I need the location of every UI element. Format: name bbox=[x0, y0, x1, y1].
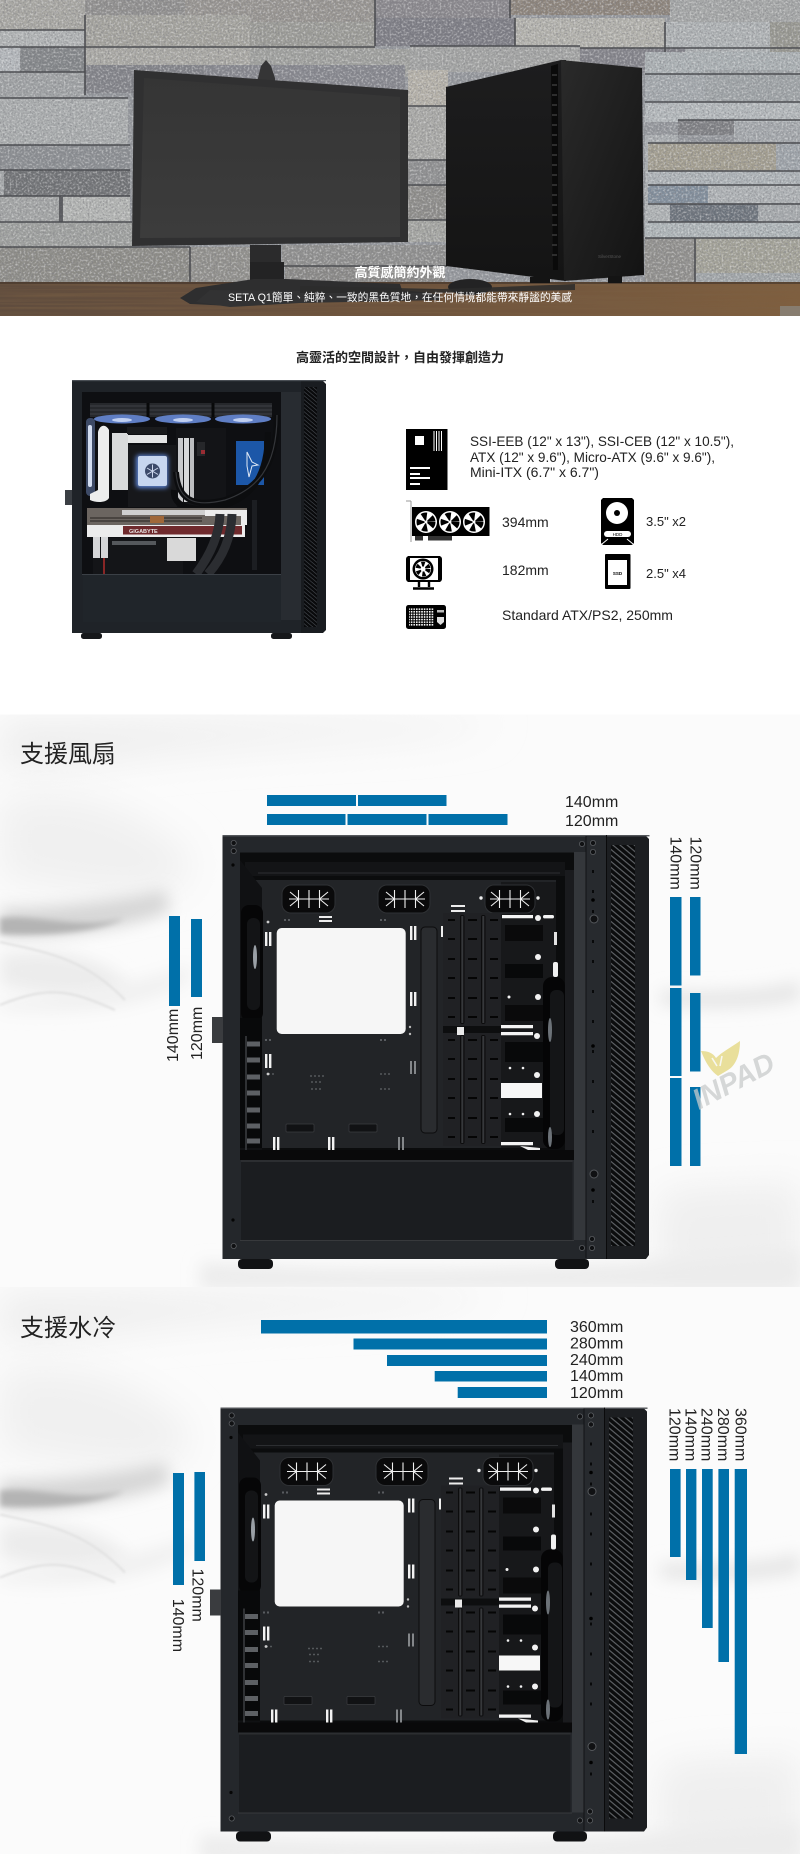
icon: HDD: HDD bbox=[613, 532, 623, 537]
panel: liquid cooling support bbox=[0, 1286, 800, 1854]
top bars: fan sizes bbox=[267, 795, 508, 825]
case interior photo bbox=[212, 835, 650, 1269]
tower case: SilverStone bbox=[598, 254, 622, 259]
case interior photo bbox=[210, 1408, 648, 1842]
panel: fan support bbox=[0, 714, 800, 1290]
label: SSD count: 2.5" x4 bbox=[646, 566, 686, 581]
icon: power supply bbox=[406, 605, 446, 629]
text: motherboard support: Mini-ITX (6.7" x 6.7") bbox=[470, 464, 599, 480]
hero panel: monitor and tower on a stone wall bbox=[0, 0, 800, 316]
top labels bbox=[570, 1319, 623, 1402]
sleeved cables bbox=[196, 514, 232, 574]
left labels bbox=[169, 1568, 206, 1652]
top fans bbox=[90, 403, 272, 424]
right labels bbox=[666, 1408, 748, 1461]
label: HDD count: 3.5" x2 bbox=[646, 514, 686, 529]
right labels bbox=[666, 836, 704, 890]
right bars bbox=[670, 1469, 747, 1754]
label: cooler height: 182mm bbox=[502, 562, 549, 578]
right labels: 240mm bbox=[698, 1408, 714, 1461]
left labels bbox=[165, 1007, 206, 1062]
icon: HDD bbox=[601, 498, 634, 545]
text: motherboard support: SSI-EEB (12" x 13"), SSI-CEB (12" x 10.5"), bbox=[470, 433, 734, 449]
right labels: 280mm bbox=[714, 1408, 731, 1461]
top labels bbox=[565, 794, 618, 830]
heading: liquid cooling: 支援水冷 bbox=[20, 1315, 116, 1342]
right labels: 120mm bbox=[686, 836, 704, 890]
top labels: 240mm bbox=[570, 1352, 623, 1369]
right labels: 140mm bbox=[666, 836, 684, 890]
watermark: INPAD: INPAD bbox=[687, 1047, 780, 1116]
icon: SSD bbox=[605, 554, 630, 589]
top labels: 120mm bbox=[565, 813, 618, 830]
text: motherboard support: ATX (12" x 9.6"), Micro-ATX (9.6" x 9.6"), bbox=[470, 449, 715, 465]
icon: motherboard bbox=[406, 429, 448, 490]
icon: CPU cooler bbox=[406, 556, 442, 588]
left labels: 140mm bbox=[169, 1599, 186, 1652]
shroud bbox=[83, 575, 281, 622]
hero caption bbox=[228, 265, 572, 304]
hero caption: SETA Q1簡單、純粹、一致的黑色質地，在任何情境都能帶來靜謐的美感 bbox=[228, 290, 572, 304]
RAM bbox=[178, 438, 205, 502]
right labels: 360mm bbox=[732, 1408, 748, 1461]
monitor bbox=[132, 60, 440, 307]
lower board bbox=[93, 537, 196, 574]
hero caption: 高質感簡約外觀 bbox=[354, 265, 446, 280]
GPU bbox=[87, 508, 247, 537]
label: GPU length: 394mm bbox=[502, 514, 549, 530]
top labels: 140mm bbox=[565, 794, 618, 811]
table bbox=[0, 282, 800, 316]
mouse and keyboard bbox=[382, 279, 575, 295]
left labels: 140mm bbox=[165, 1009, 182, 1062]
right labels: 140mm bbox=[682, 1408, 698, 1461]
motherboard bbox=[128, 445, 177, 507]
tower case bbox=[446, 60, 644, 283]
top labels: 360mm bbox=[570, 1319, 623, 1336]
heading: flexible space: 高靈活的空間設計，自由發揮創造力 bbox=[296, 350, 504, 365]
text: motherboard support bbox=[470, 433, 734, 480]
top bars: radiator sizes bbox=[261, 1320, 547, 1398]
left bars bbox=[169, 916, 202, 1006]
stone wall bbox=[0, 0, 800, 290]
left white fan and heatsink bbox=[86, 418, 167, 502]
left bars bbox=[173, 1472, 205, 1585]
icon: graphics card bbox=[406, 501, 490, 542]
top labels: 140mm bbox=[570, 1368, 623, 1385]
icon: SSD: SSD bbox=[613, 571, 623, 576]
right bars bbox=[670, 897, 700, 1166]
tubes bbox=[174, 415, 277, 509]
top labels: 280mm bbox=[570, 1336, 623, 1352]
label: power supply: Standard ATX/PS2, 250mm bbox=[502, 607, 673, 623]
panel: specifications bbox=[406, 429, 734, 629]
heading: fan support: 支援風扇 bbox=[20, 741, 116, 768]
panel: case with installed components bbox=[65, 380, 326, 639]
top labels: 120mm bbox=[570, 1385, 623, 1402]
AIO pump bbox=[136, 455, 168, 488]
right labels: 120mm bbox=[666, 1408, 682, 1461]
marble background bbox=[0, 714, 800, 1290]
left labels: 120mm bbox=[189, 1007, 206, 1060]
left labels: 120mm bbox=[188, 1568, 206, 1622]
marble background bbox=[0, 1286, 800, 1854]
GPU: GIGABYTE bbox=[129, 529, 158, 535]
blue card bbox=[236, 441, 264, 485]
